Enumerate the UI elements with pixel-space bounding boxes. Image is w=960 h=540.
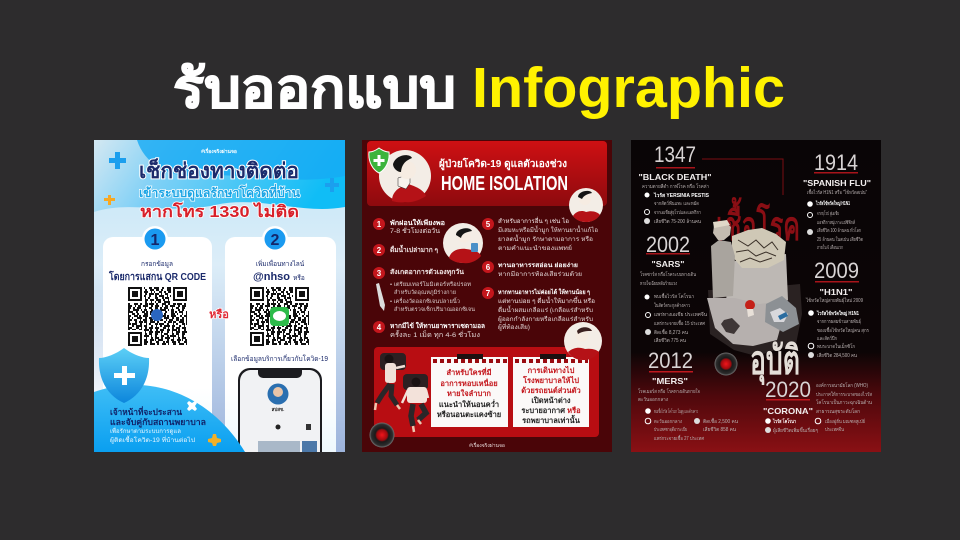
list column right: หากมีอาการท้องเสียร่วมด้วย [498, 270, 582, 278]
list column left: 3 [377, 269, 382, 278]
timeline 2002: แพร่ทางเอเชีย ประเทศจีน [654, 311, 708, 318]
timeline 2002: 2002 [646, 232, 690, 257]
list column left: 4 [377, 323, 382, 332]
card 1: โดยการแสกน QR CODE [108, 270, 206, 283]
panel: blue contact infographic [94, 140, 881, 452]
card 2: @nhso หรือ [253, 271, 305, 283]
header: ผู้ป่วยโควิด-19 ดูแลตัวเองช่วง [439, 157, 567, 171]
timeline 2020: โคโรนาเป็นภาวะฉุกเฉินด้าน [816, 398, 873, 406]
hashtag: #เรื่องจริงผ่านจอ [201, 147, 237, 155]
timeline 1347: จากสัตว์ฟันแทะ และหมัด [654, 200, 699, 207]
timeline 2020: ไวรัส โคโรนา [772, 418, 796, 425]
note 2: เปิดหน้าต่าง [531, 396, 571, 405]
heading: white block text: อุบัติ [750, 339, 800, 386]
timeline 2009: "H1N1" [820, 288, 853, 297]
note 1: สำหรับใครที่มี [446, 366, 492, 377]
timeline 1914: จากยุโรป สู่เอเชีย [817, 210, 839, 217]
icon: camera lens [370, 422, 394, 448]
card 2: 2 [271, 232, 280, 249]
timeline 1914 [803, 150, 871, 251]
timeline 2012: แพร่กระจายเชื้อ 27 ประเทศ [654, 433, 705, 442]
bottom wave with note: และจับคู่กับสถานพยาบาล [110, 417, 206, 428]
timeline 2020: 2020 [765, 377, 811, 402]
list column left: 1 [377, 220, 382, 229]
timeline 2020: สาธารณสุขระดับโลก [816, 408, 860, 415]
timeline 1914: เชื้อไวรัส H1N1 หรือ "ไข้หวัดสเปน" [807, 187, 867, 196]
timeline 2012: พบเชื้อไวรัส โคโรนา ในอูฐ และค้างคาว [654, 406, 698, 415]
list column left: 2 [377, 246, 382, 255]
timeline 2012: 2012 [648, 348, 693, 373]
note 2: การเดินทางไป [528, 365, 575, 375]
timeline 2009: พบระบาดในเม็กซิโก [817, 342, 855, 350]
illustration: coughing [569, 188, 603, 222]
timeline 2009: 2009 [814, 258, 859, 283]
list column left: สำหรับตรวจเช็กปริมาณออกซิเจน [394, 305, 475, 313]
timeline 2012: ติดเชื้อ 2,500 คน [703, 416, 739, 425]
list column left: สังเกตอาการตัวเองทุกวัน [390, 268, 465, 276]
timeline 1914: แอฟริกาหมู่เกาะแปซิฟิกส์ [817, 219, 855, 226]
bottom wave with note: เพื่อรักษาตามระบบการดูแล [110, 427, 181, 435]
icon: camera lens [714, 352, 738, 376]
timeline 2020: ประเทศจีน [825, 426, 844, 433]
collage: central photo [707, 220, 802, 356]
heading: เช็กช่องทางติดต่อ [139, 157, 299, 183]
timeline 2002: พบเชื้อไวรัส โคโรนา [654, 291, 694, 300]
list column left [373, 218, 485, 339]
timeline 2002: แพร่กระจายเชื้อ 15 ประเทศ [654, 318, 706, 327]
timeline 2012: ประเทศซาอุดีอาระเบีย [654, 426, 687, 433]
title [173, 56, 785, 120]
timeline 2002: โรคซาร์ส หรือโรคระบบทางเดิน [640, 271, 696, 278]
note 2: ด้วยรถยนต์ส่วนตัว [521, 386, 581, 395]
timeline 2009: และสัตว์ปีก [817, 335, 837, 342]
card 2: เพิ่มเพื่อนทางไลน์ [256, 259, 305, 268]
QR code 2 [249, 286, 310, 347]
timeline 1347: ความตายสีดำ กาฬโรค หรือ โรคห่า [642, 183, 709, 190]
timeline 1914: 1914 [814, 150, 858, 175]
timeline 2020: เมืองอู่ฮั่น มณฑลหูเป่ย์ [825, 418, 865, 425]
illustration: checking oxygen [443, 223, 483, 263]
phone [238, 368, 322, 452]
heading: red gothic text: เชื้อโรค [716, 197, 800, 249]
heading: หากโทร 1330 ไม่ติด [140, 201, 299, 221]
timeline 2002: ติดเชื้อ 8,273 คน [654, 327, 689, 336]
card 1: กรอกข้อมูล [141, 260, 173, 268]
timeline 1914: 25 ล้านคน ในสเปน เสียชีวิต [817, 236, 863, 243]
bottom wave with note [94, 385, 245, 452]
note 2 [513, 354, 589, 427]
phone: สปสช. [272, 406, 284, 412]
QR code 1 [127, 286, 188, 347]
list column left: ดื่มน้ำเปล่ามาก ๆ [390, 244, 439, 254]
list column left: หากมีไข้ ให้ทานยาพาราเซตามอล [390, 321, 485, 330]
timeline 2002: ในสัตว์ตระกูลค้างคาว [654, 302, 690, 309]
timeline 2009: เสียชีวิต 284,500 คน [817, 352, 858, 359]
panel: home isolation [362, 140, 612, 452]
timeline 2020: ประกาศให้การระบาดของไวรัส [816, 391, 872, 398]
bottom wave with note: ผู้ติดเชื้อโควิด-19 ที่บ้านต่อไป [110, 434, 195, 444]
timeline 2012: ตะวันออกกลาง [654, 419, 682, 425]
timeline 1347: 1347 [654, 142, 696, 167]
timeline 2002: หายใจเฉียบพลันร้ายแรง [640, 280, 677, 287]
timeline 1914: ภายใน 6 เดือนแรก [817, 244, 843, 251]
timeline 1347: ไวรัส YERSINIA PESTIS [653, 192, 710, 199]
icon: green shield [369, 148, 389, 173]
list column right: 6 [486, 263, 491, 272]
icon: shield [99, 348, 149, 403]
card 1: 1 [151, 232, 160, 249]
timeline 2020: ผู้เสียชีวิตเพิ่มขึ้นเรื่อยๆ [773, 425, 818, 434]
timeline 1347: เสียชีวิต 75-200 ล้านคน [654, 218, 702, 225]
list column right: สำหรับอาการอื่น ๆ เช่น ไอ [498, 217, 569, 225]
list column right: ทานอาหารรสอ่อน ย่อยง่าย [498, 262, 579, 269]
title: รับออกแบบ [173, 59, 456, 119]
list column right: แต่ทานบ่อย ๆ ดื่มน้ำให้มากขึ้น หรือ [498, 295, 595, 305]
timeline 2009 [805, 258, 869, 359]
list column left: 7-8 ชั่วโมงต่อวัน [390, 226, 441, 235]
timeline 2012: "MERS" [652, 376, 688, 386]
label: or: หรือ [209, 308, 229, 321]
timeline 2012: โรคเมอร์ส หรือ โรคทางเดินหายใจ [638, 388, 700, 395]
illustration: patient [379, 150, 431, 202]
timeline 2002: เสียชีวิต 775 คน [654, 337, 687, 344]
list column right: ดื่มน้ำผสมเกลือแร่ (เกลือแร่สำหรับ [498, 304, 593, 314]
heading [139, 157, 300, 221]
note 1: แนะนำให้นอนคว่ำ [439, 398, 499, 409]
timeline 2020 [763, 377, 873, 434]
list column right: ผู้ออกกำลังกายหรือเกลือแร่สำหรับ [498, 315, 593, 323]
bottom red box [374, 347, 599, 437]
bottom wave with note: เจ้าหน้าที่จะประสาน [110, 405, 182, 417]
list column right: 7 [486, 289, 491, 298]
timeline 1347: "BLACK DEATH" [638, 172, 712, 182]
list column right [482, 217, 598, 331]
timeline 2009: จากการผสมข้ามสายพันธุ์ [817, 318, 861, 325]
list column right: มีเสมหะหรือมีน้ำมูก ให้ทานยาน้ำแก้ไอ [498, 224, 598, 234]
heading: เข้าระบบดูแลรักษาโควิดที่บ้าน [139, 184, 300, 201]
list column left: • เตรียมเทอร์โมมิเตอร์หรือปรอท [390, 280, 471, 288]
list column right: ตามคำแนะนำของแพทย์ [498, 244, 572, 252]
list column left: ครั้งละ 1 เม็ด ทุก 4-6 ชั่วโมง [390, 330, 480, 339]
note 2: ระบายอากาศ หรือ [521, 406, 581, 415]
hashtag: #เรื่องจริงผ่านจอ [469, 442, 505, 449]
note 1: หรือนอนตะแคงซ้าย [437, 410, 501, 419]
header: HOME ISOLATION [441, 173, 568, 195]
timeline 1914: "SPANISH FLU" [803, 178, 871, 188]
timeline 1347 [638, 142, 712, 225]
timeline 2009: ไข้หวัดใหญ่สายพันธุ์ใหม่ 2009 [805, 297, 863, 304]
list column right: ยาลดน้ำมูก รักษาตามอาการ หรือ [498, 233, 593, 243]
list column right: ผู้ที่ท้องเสีย) [498, 323, 530, 331]
list column right: 5 [486, 220, 491, 229]
note 1: อาการหอบเหนื่อย [440, 377, 498, 388]
card 1 [103, 226, 212, 452]
header [367, 141, 607, 206]
illustration: sleeping people [375, 353, 428, 432]
timeline 1914: ไวรัสไข้หวัดใหญ่ H1N1 [815, 200, 850, 207]
timeline 2009: ไวรัสไข้หวัดใหญ่ H1N1 [816, 310, 859, 317]
note 1 [431, 354, 508, 427]
timeline 2009: ของเชื้อไข้หวัดใหญ่คน สุกร [817, 325, 869, 334]
timeline 2002 [640, 232, 708, 344]
card 2 [94, 226, 336, 452]
list column right: หากทานอาหารไม่ค่อยได้ ให้ทานน้อย ๆ [498, 288, 590, 296]
note 1: หายใจลำบาก [447, 389, 491, 398]
timeline 1347: จากเอเชียสู่ยุโรปและแอฟริกา [654, 209, 701, 216]
list column left: • เครื่องวัดออกซิเจนปลายนิ้ว [390, 297, 460, 305]
timeline 2020: องค์การอนามัยโลก (WHO) [816, 382, 868, 389]
card 2: เลือกข้อมูลบริการเกี่ยวกับโควิด-19 [231, 354, 328, 363]
illustration: man thinking [564, 322, 602, 360]
timeline 2012: ตะวันออกกลาง [638, 397, 669, 403]
panel: pandemic timeline [631, 140, 881, 452]
list column left: พักผ่อนให้เพียงพอ [390, 218, 445, 227]
timeline 2012: เสียชีวิต 858 คน [703, 426, 737, 433]
icons: plus signs [104, 152, 339, 205]
note 2: รถพยาบาลเท่านั้น [522, 414, 581, 425]
timeline 2020: "CORONA" [763, 406, 813, 416]
timeline 1914: เสียชีวิต 100 ล้านคน ทั่วโลก [817, 227, 861, 234]
list column left: สำหรับวัดอุณหภูมิร่างกาย [394, 289, 456, 296]
timeline 2002: "SARS" [652, 260, 685, 269]
note 2: โรงพยาบาลให้ไป [522, 375, 579, 385]
timeline 2012 [638, 348, 739, 442]
title: Infographic [472, 56, 785, 120]
